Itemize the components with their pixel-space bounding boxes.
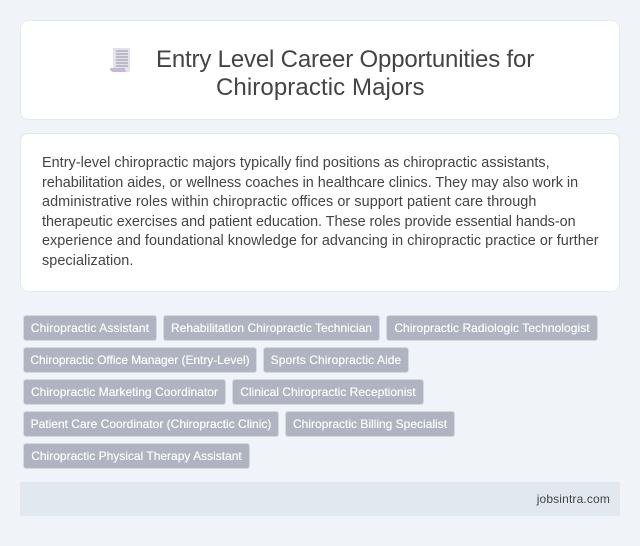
tag: Clinical Chiropractic Receptionist bbox=[240, 385, 416, 399]
tag bbox=[23, 347, 257, 373]
tag: Chiropractic Marketing Coordinator bbox=[31, 385, 218, 399]
tag: Chiropractic Radiologic Technologist bbox=[394, 321, 590, 335]
footer source: jobsintra.com bbox=[537, 492, 610, 506]
tag bbox=[285, 411, 455, 437]
tag bbox=[23, 443, 250, 469]
tag bbox=[263, 347, 409, 373]
tag bbox=[23, 411, 279, 437]
panel: description bbox=[20, 133, 620, 292]
panel: header bbox=[20, 20, 620, 120]
tag: Chiropractic Office Manager (Entry-Level) bbox=[30, 353, 250, 367]
career tags bbox=[23, 315, 598, 469]
tag bbox=[23, 379, 226, 405]
description text bbox=[42, 155, 599, 268]
title: Entry Level Career Opportunities for bbox=[156, 46, 534, 72]
tag: Chiropractic Physical Therapy Assistant bbox=[31, 449, 242, 463]
description text: therapeutic exercises and patient education. These roles provide essential hands-on bbox=[42, 214, 576, 230]
tag: Rehabilitation Chiropractic Technician bbox=[171, 321, 372, 335]
title bbox=[156, 46, 534, 101]
tag: Chiropractic Assistant bbox=[31, 321, 149, 335]
description text: Entry-level chiropractic majors typically find positions as chiropractic assistants, bbox=[42, 155, 550, 171]
tag bbox=[386, 315, 598, 341]
footer bar bbox=[20, 482, 620, 516]
tag bbox=[163, 315, 380, 341]
description text: rehabilitation aides, or wellness coaches in healthcare clinics. They may also work in bbox=[42, 174, 578, 190]
icon: document scroll bbox=[110, 48, 130, 72]
description text: administrative roles within chiropractic offices or support patient care through bbox=[42, 194, 536, 210]
description text: experience and foundational knowledge for advancing in chiropractic practice or further bbox=[42, 233, 599, 249]
tag bbox=[23, 315, 157, 341]
tag bbox=[232, 379, 424, 405]
tag: Chiropractic Billing Specialist bbox=[293, 417, 447, 431]
title: Chiropractic Majors bbox=[216, 74, 425, 101]
description text: specialization. bbox=[42, 252, 133, 268]
tag: Patient Care Coordinator (Chiropractic Clinic) bbox=[31, 417, 271, 431]
tag: Sports Chiropractic Aide bbox=[271, 353, 401, 367]
